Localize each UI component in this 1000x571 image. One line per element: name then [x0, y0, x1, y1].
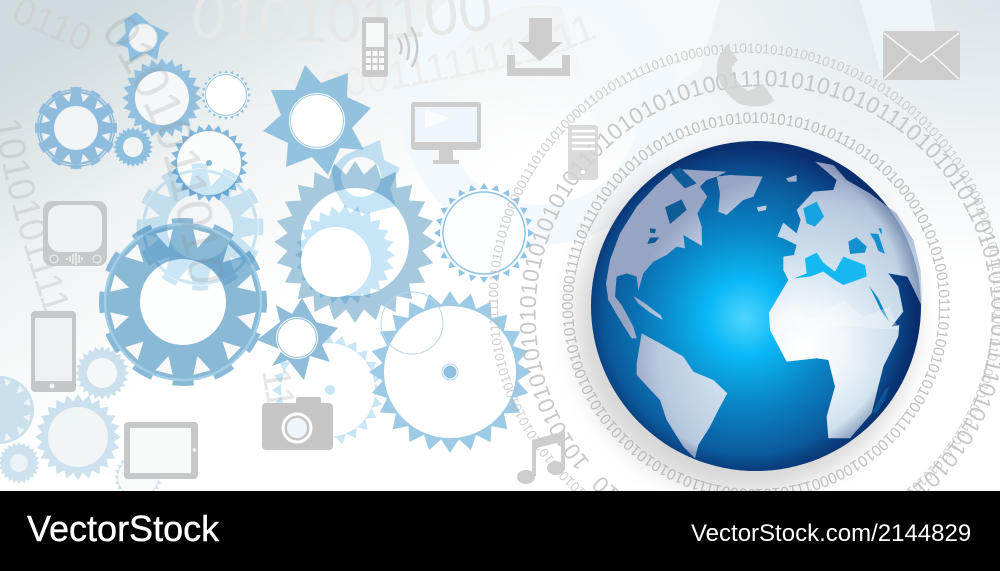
- large binary digits over gears: 0101011010: [106, 17, 223, 282]
- gear: small star top: [116, 12, 169, 62]
- icon: music note: [517, 431, 565, 484]
- gear: thin right: [434, 183, 534, 283]
- continent: Africa and Eurasia: [769, 162, 922, 438]
- continent: Cuba and islands: [633, 175, 797, 320]
- gear: pale lower middle: [272, 334, 384, 446]
- globe: [591, 141, 922, 471]
- gear: lower left cluster: [0, 346, 162, 501]
- icon: document: [568, 125, 598, 180]
- large faint binary digits top: 00000011111111111: [394, 15, 596, 88]
- gear: large centre: [274, 161, 436, 323]
- gear: star large top: [263, 65, 371, 175]
- gear: medium with centre dot: [170, 124, 248, 202]
- gear: thin ring: [201, 70, 251, 120]
- continent: South America: [637, 333, 727, 458]
- large faint binary digits top: [15, 0, 596, 88]
- icon: square media device: [43, 201, 107, 266]
- globe shadow: [575, 152, 915, 492]
- icon: download: [507, 18, 570, 76]
- gear: star small lower: [257, 298, 338, 380]
- gear: inner white hub: [301, 227, 371, 297]
- gear: pale upper overlay: [331, 140, 400, 214]
- gear: pale overlay over large gear: [139, 166, 261, 288]
- ring: small inner: 0000111101010101010101010100101010000011111011101010101010110101010101010101010111010101000010101010010111010010101001110100101000001110101010101011010101010101010100000: [562, 112, 950, 491]
- large binary digits over gears: [0, 17, 294, 403]
- icon: camera: [262, 397, 333, 450]
- gear: toothed top: [122, 58, 202, 138]
- sphere edge shading: [591, 141, 921, 471]
- gear: spoked upper left: [37, 89, 115, 167]
- footer logo text: VectorStock: [27, 508, 220, 549]
- large binary digits over gears: 111: [262, 370, 294, 403]
- footer bar: [0, 491, 1000, 571]
- gear: large spoked: [102, 221, 264, 383]
- gear: pale inner gear overlay: [295, 205, 395, 305]
- icon: tablet: [124, 422, 198, 479]
- ocean sphere: [591, 141, 921, 471]
- footer url text: VectorStock.com/2144829: [691, 520, 971, 547]
- continents: [606, 162, 922, 458]
- icon: telephone handset: [717, 45, 774, 106]
- continent: Greenland: [717, 175, 763, 215]
- icon: desktop monitor: [411, 102, 481, 164]
- seas: [773, 202, 898, 413]
- icon: mobile phone and signal: [362, 17, 417, 77]
- gear: large lower right: [369, 291, 531, 453]
- gear: small star left: [113, 127, 153, 167]
- icon: envelope: [883, 31, 960, 80]
- icon: smartphone: [31, 311, 76, 392]
- continent: North America: [606, 167, 727, 338]
